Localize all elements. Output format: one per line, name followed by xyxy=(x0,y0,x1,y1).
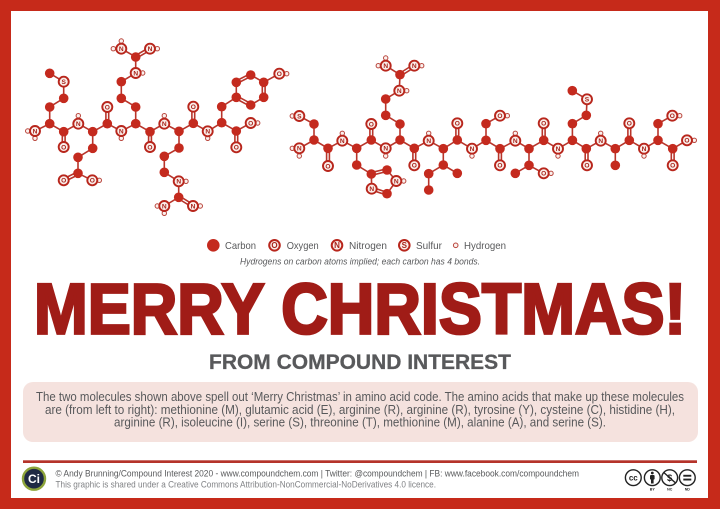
icon: NC: NC xyxy=(667,488,673,492)
description text: arginine (R), isoleucine (I), serine (S), threonine (T), methionine (M), alanine (A), and serine (S). xyxy=(114,416,606,430)
amino acid: threonine (T): O xyxy=(541,171,546,178)
amino acid: arginine (R) third: N xyxy=(412,63,417,70)
legend: sulfur: S xyxy=(402,241,408,250)
amino acid: tyrosine (Y): N xyxy=(205,129,210,136)
amino acid: arginine (R) third: N xyxy=(397,88,402,95)
legend xyxy=(207,239,506,252)
bonds: left molecule xyxy=(28,41,287,213)
legend: oxygen xyxy=(269,240,319,252)
amino acid: glutamic acid (E) xyxy=(59,102,112,185)
icon: ND: ND xyxy=(685,488,690,492)
amino acid: alanine (A): O xyxy=(627,121,632,128)
amino acid: arginine (R) third xyxy=(376,56,424,170)
legend: carbon xyxy=(207,239,256,252)
amino acid: serine (S) second: O xyxy=(684,138,690,145)
amino acid: serine (S) xyxy=(467,111,509,170)
bonds: right molecule xyxy=(292,58,694,195)
amino acid: methionine (M) xyxy=(26,68,69,152)
legend note: Hydrogens on carbon atoms implied; each carbon has 4 bonds. xyxy=(240,256,480,266)
amino acid: methionine (M) second: S xyxy=(585,97,590,104)
amino acid: arginine (R): O xyxy=(147,144,153,151)
amino acid: glutamic acid (E): O xyxy=(61,178,66,185)
amino acid: serine (S) second: O xyxy=(670,163,675,170)
amino acid: methionine (M) second: N xyxy=(556,146,561,153)
amino acid: arginine (R) third: N xyxy=(383,63,388,70)
molecule: left (MERRY) xyxy=(26,39,289,215)
amino acid: arginine (R) second: N xyxy=(162,203,167,210)
amino acid: cysteine (C): O xyxy=(325,163,331,170)
legend: sulfur xyxy=(399,240,442,252)
amino acid: histidine (H): N xyxy=(369,186,374,193)
description text xyxy=(36,390,684,430)
footer credits: © Andy Brunning/Compound Interest 2020 - www.compoundchem.com | Twitter: @compoundchem | FB: www.facebook.com/compoundchem xyxy=(56,468,579,478)
amino acid: histidine (H): N xyxy=(394,178,399,185)
amino acid: arginine (R): N xyxy=(119,46,124,53)
amino acid: arginine (R) second: N xyxy=(176,179,181,186)
amino acid: alanine (A): N xyxy=(598,138,603,145)
amino acid: serine (S): N xyxy=(470,146,475,153)
legend: sulfur: Sulfur xyxy=(416,240,442,252)
legend: carbon: Carbon xyxy=(225,240,256,252)
amino acid: serine (S) second: O xyxy=(670,113,675,120)
logo: Compound Interest: Ci xyxy=(28,472,40,486)
amino acid: isoleucine (I) xyxy=(424,118,462,195)
amino acid: arginine (R) second: O xyxy=(191,104,196,111)
amino acid: threonine (T): O xyxy=(541,121,546,128)
logo: Compound Interest xyxy=(23,468,45,490)
panel: description xyxy=(23,382,698,442)
legend: hydrogen: Hydrogen xyxy=(464,240,506,252)
footer licence: This graphic is shared under a Creative Commons Attribution-NonCommercial-NoDerivatives 4.0 licence. xyxy=(56,480,436,490)
licence icons xyxy=(625,470,695,492)
amino acid: threonine (T) xyxy=(510,118,553,178)
amino acid: cysteine (C) xyxy=(290,111,333,171)
amino acid: isoleucine (I): N xyxy=(426,138,431,145)
amino acid: arginine (R) second: N xyxy=(191,203,196,210)
amino acid: histidine (H) xyxy=(337,119,406,198)
amino acid: arginine (R): N xyxy=(148,46,153,53)
amino acid: serine (S): O xyxy=(497,163,503,170)
amino acid: methionine (M): O xyxy=(61,144,66,151)
amino acid: arginine (R): N xyxy=(133,70,138,77)
amino acid: serine (S) second xyxy=(639,111,696,170)
amino acid: arginine (R) xyxy=(111,39,160,152)
amino acid: serine (S) second: N xyxy=(642,146,647,153)
description text: are (from left to right): methionine (M), glutamic acid (E), arginine (R), arginine (R), tyrosine (Y), cysteine (C), histidine (H), xyxy=(45,403,675,417)
amino acid: arginine (R) second xyxy=(155,102,202,216)
legend: nitrogen: Nitrogen xyxy=(349,240,387,252)
amino acid: arginine (R) third: O xyxy=(412,163,417,170)
legend: nitrogen: N xyxy=(334,241,340,250)
amino acid: serine (S): O xyxy=(497,113,503,120)
amino acid: methionine (M): S xyxy=(61,79,66,86)
icon: BY: BY xyxy=(650,488,655,492)
amino acid: glutamic acid (E): O xyxy=(105,104,110,111)
amino acid: threonine (T): N xyxy=(513,138,518,145)
amino acid: methionine (M): N xyxy=(33,128,38,135)
amino acid: arginine (R) second: N xyxy=(162,121,167,128)
amino acid: tyrosine (Y): O xyxy=(277,71,282,78)
molecule: right (CHRISTMAS) xyxy=(290,56,696,198)
icon: CC: cc xyxy=(629,473,638,482)
amino acid: arginine (R): N xyxy=(119,128,124,135)
icon: NC: $ xyxy=(667,473,673,484)
amino acid: histidine (H): N xyxy=(340,138,345,145)
amino acid: arginine (R) third: N xyxy=(383,146,388,153)
amino acid: alanine (A) xyxy=(596,118,634,170)
amino acid: glutamic acid (E): O xyxy=(90,178,95,185)
amino acid: cysteine (C): N xyxy=(297,146,302,153)
legend: oxygen: Oxygen xyxy=(287,240,319,252)
legend: oxygen: O xyxy=(271,241,278,250)
amino acid: methionine (M) second xyxy=(553,86,592,170)
amino acid: methionine (M) second: O xyxy=(584,163,590,170)
legend: nitrogen xyxy=(332,240,387,252)
subtitle: FROM COMPOUND INTEREST xyxy=(209,350,511,374)
amino acid: tyrosine (Y): O xyxy=(248,120,253,127)
amino acid: tyrosine (Y): O xyxy=(234,145,239,152)
icon: NC xyxy=(662,470,678,492)
amino acid: tyrosine (Y) xyxy=(203,69,289,152)
footer rule xyxy=(23,460,697,463)
amino acid: cysteine (C): S xyxy=(297,113,302,120)
amino acid: glutamic acid (E): N xyxy=(76,121,81,128)
amino acid: isoleucine (I): O xyxy=(455,121,460,128)
amino acid: histidine (H): O xyxy=(369,121,374,128)
